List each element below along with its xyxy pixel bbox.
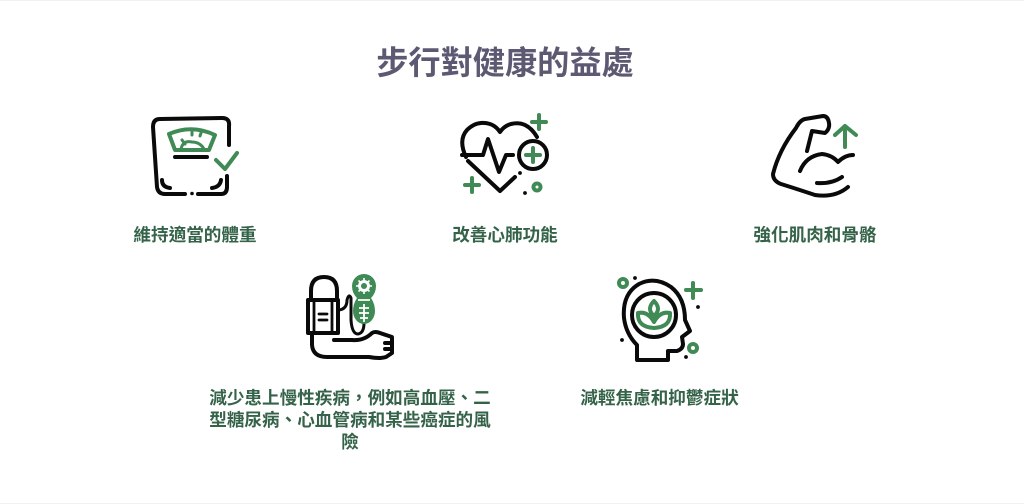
label: weight: 維持適當的體重 — [133, 225, 257, 245]
label: muscles and bones: 強化肌肉和骨骼 — [753, 225, 877, 245]
icon: head with lotus — [619, 276, 701, 360]
label: chronic disease: 減少患上慢性疾病，例如高血壓、二型糖尿病、心血管病和某些癌症的風險 — [209, 388, 491, 452]
label: heart and lungs: 改善心肺功能 — [452, 225, 558, 245]
label: anxiety and depression: 減輕焦慮和抑鬱症狀 — [580, 388, 739, 408]
title: 步行對健康的益處 — [376, 45, 634, 81]
icon: flexed arm with up arrow — [773, 116, 856, 196]
icon: weighing scale — [153, 118, 237, 195]
icon: blood pressure cuff and arm — [308, 274, 392, 358]
icon: heart with pulse — [462, 115, 547, 195]
